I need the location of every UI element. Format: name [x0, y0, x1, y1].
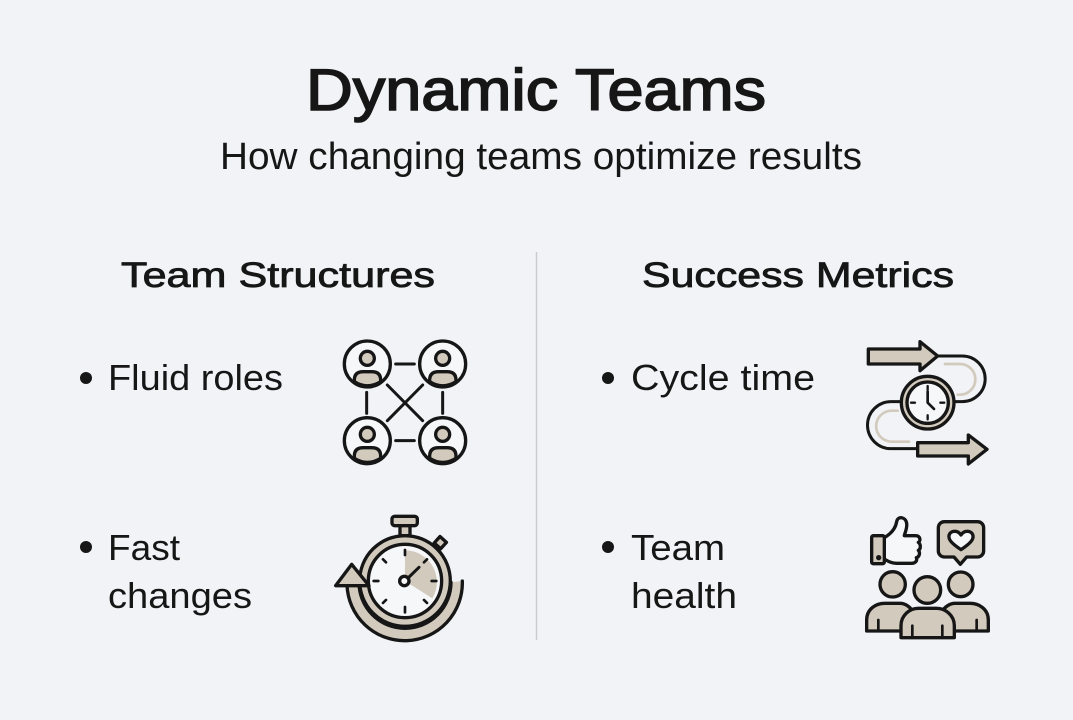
panel: team structures — [80, 256, 466, 641]
bullet item: team health: health — [631, 575, 737, 616]
icon: connected team network — [344, 341, 466, 464]
bullet item: cycle time: Cycle time — [631, 357, 815, 398]
icon: team with thumbs up and heart — [867, 518, 988, 638]
bullet item: fast changes — [80, 527, 252, 616]
bullet item: fast changes: changes — [108, 575, 252, 616]
subtitle: How changing teams optimize results — [220, 136, 862, 178]
title: Dynamic Teams — [306, 58, 766, 123]
heading: team structures: Team Structures — [121, 256, 435, 295]
bullet item: fluid roles: Fluid roles — [108, 357, 283, 398]
bullet item: fast changes: Fast — [108, 527, 180, 568]
bullet item: team health — [602, 527, 737, 616]
icon: stopwatch with circular arrow — [336, 516, 462, 641]
bullet item: team health: Team — [631, 527, 725, 568]
icon: cycle time arrows and clock — [867, 342, 987, 464]
panel: success metrics — [602, 256, 988, 638]
heading: success metrics: Success Metrics — [642, 256, 954, 295]
divider — [536, 252, 538, 640]
